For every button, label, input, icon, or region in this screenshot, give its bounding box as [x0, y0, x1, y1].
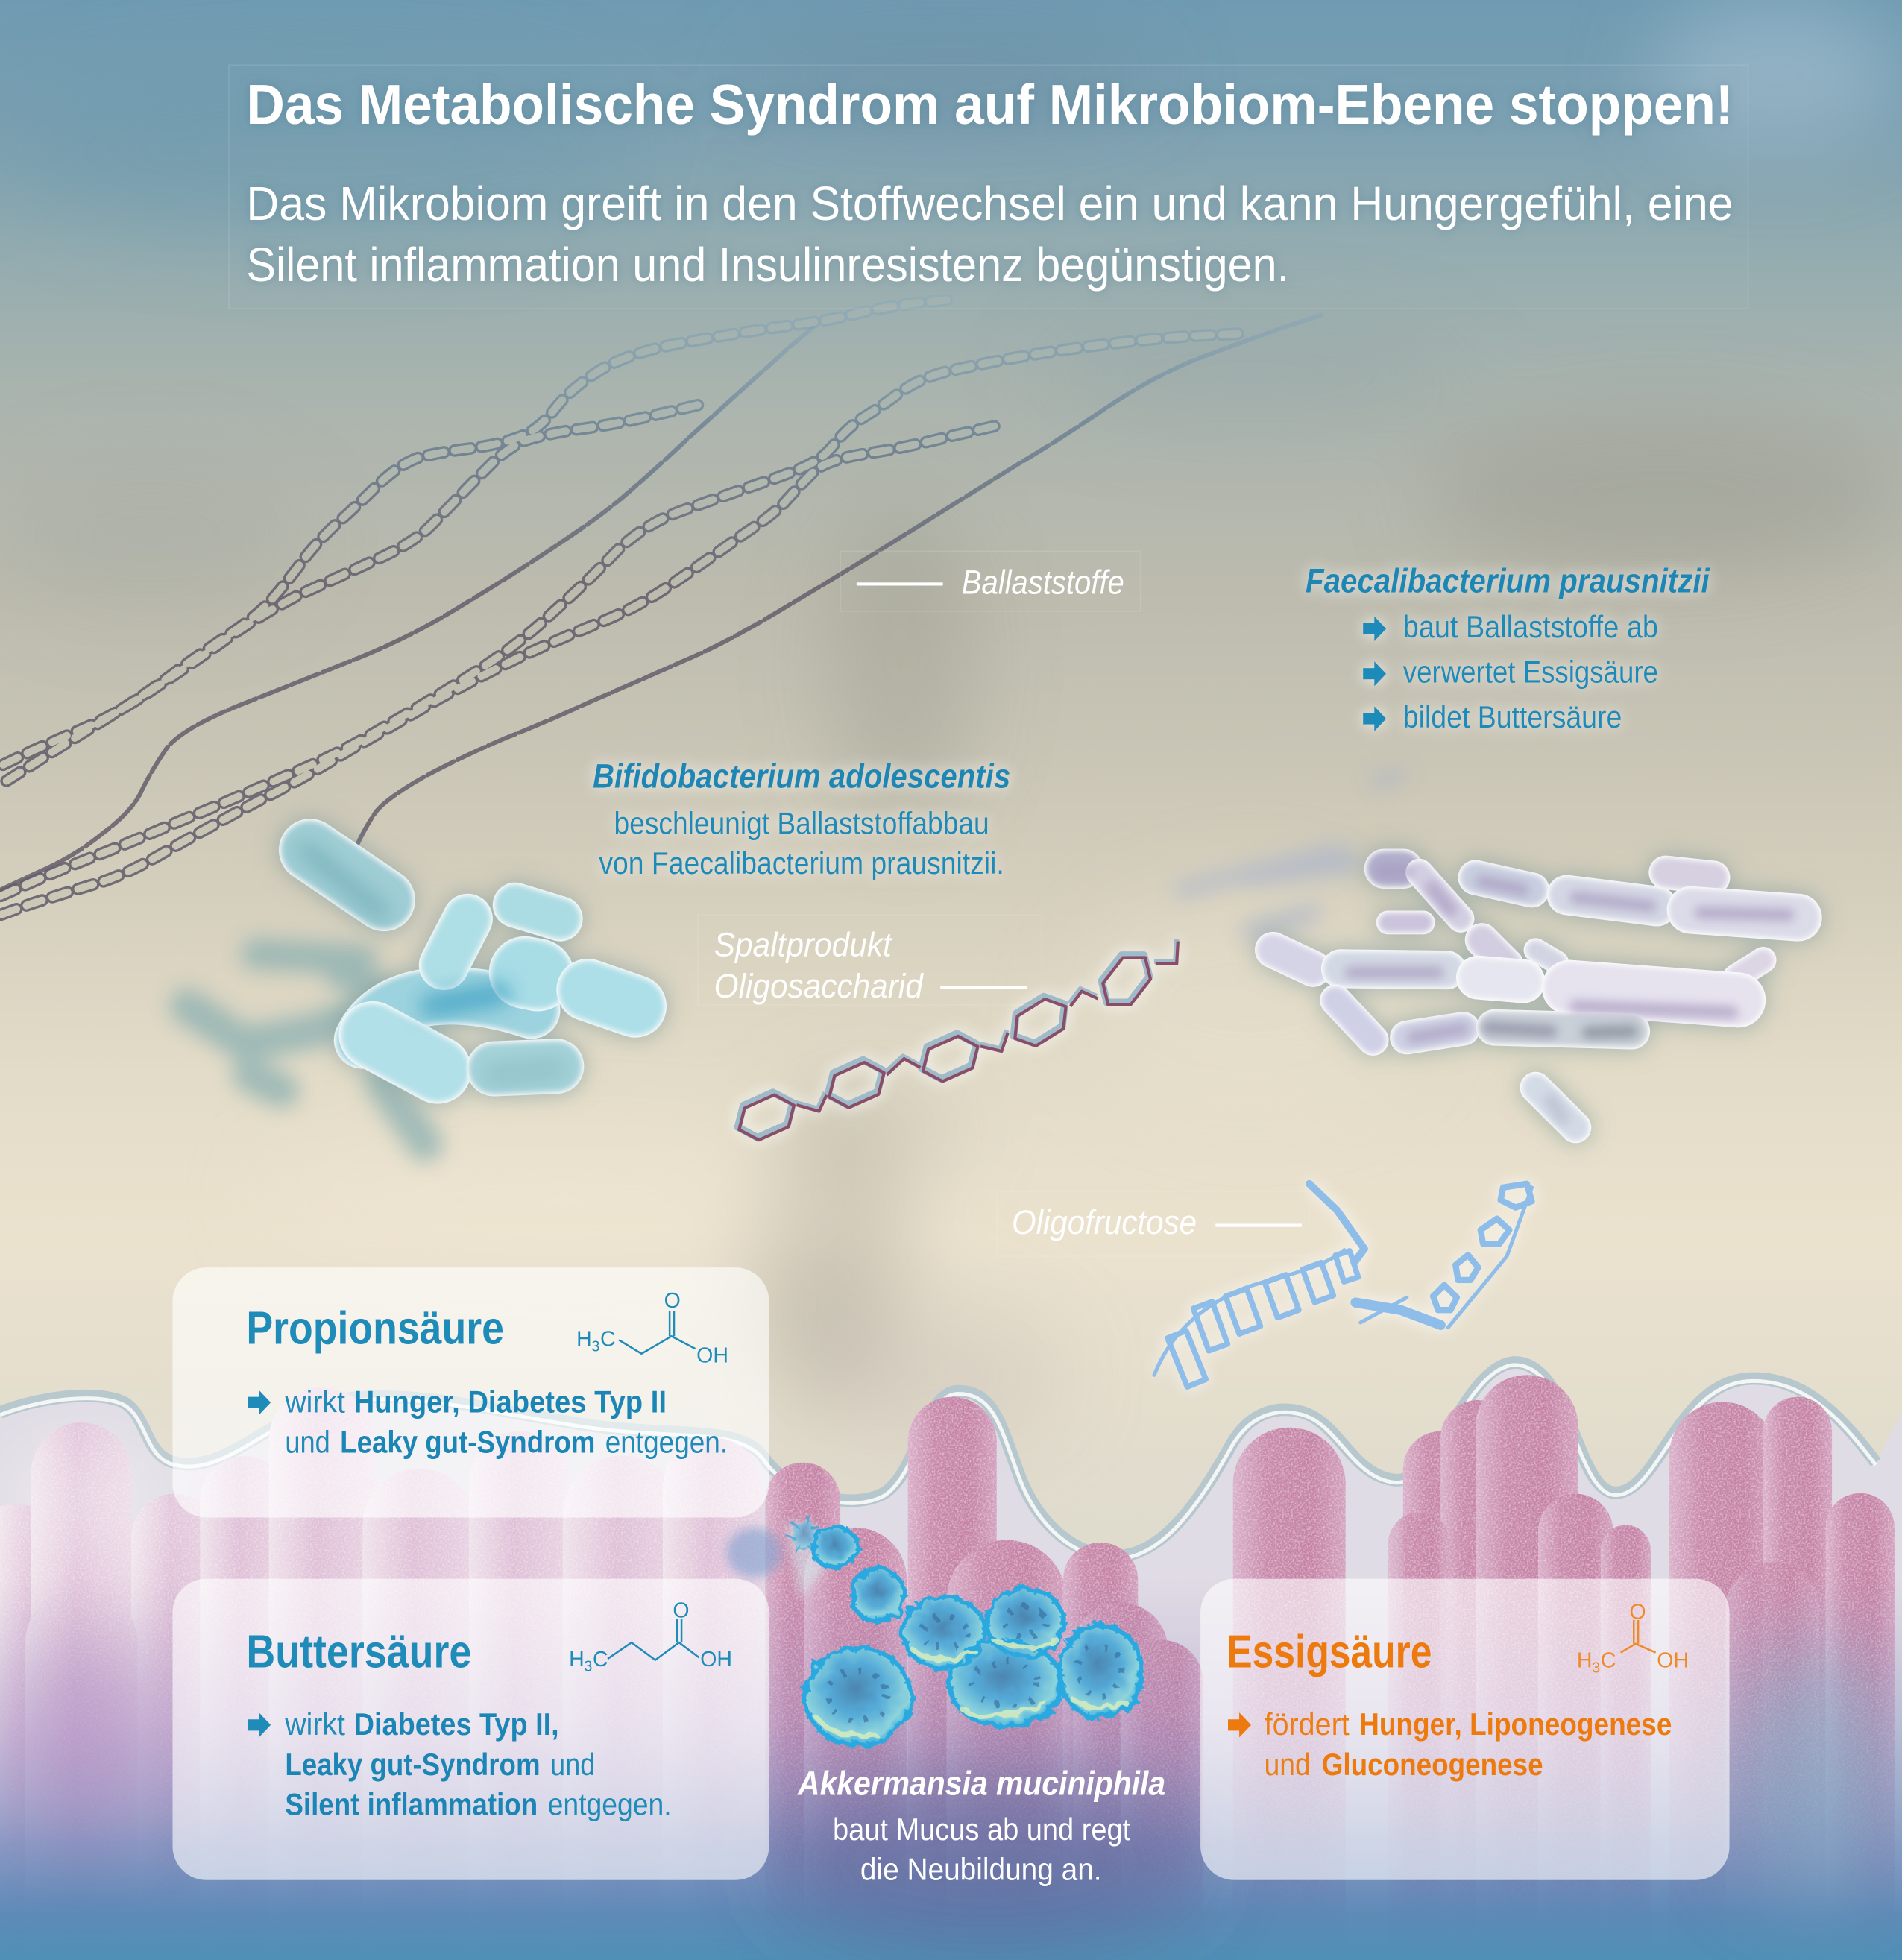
left pale villi [0, 1387, 763, 1960]
panel: Buttersäure [172, 1579, 769, 1880]
formula: propionic acid [576, 1289, 728, 1368]
effect text: und [285, 1424, 330, 1459]
label: Spaltprodukt Oligosaccharid: Spaltprodukt [714, 926, 893, 964]
intro text: Silent inflammation und Insulinresistenz begünstigen. [246, 238, 1289, 292]
text block: Faecalibacterium prausnitzii [1306, 562, 1710, 734]
formula: propionic acid: H [576, 1328, 592, 1352]
label: Spaltprodukt Oligosaccharid: Oligosaccharid [714, 967, 924, 1005]
effect text: Leaky gut-Syndrom [340, 1424, 595, 1459]
formula: butyric acid: 3 [584, 1659, 592, 1675]
panel: Propionsäure [172, 1267, 769, 1517]
text block: Faecalibacterium prausnitzii: Faecalibacterium prausnitzii [1306, 562, 1710, 600]
text block: Bifidobacterium adolescentis: beschleunigt Ballaststoffabbau [614, 805, 989, 840]
text block: Faecalibacterium prausnitzii: verwertet Essigsäure [1403, 654, 1658, 689]
label: Oligofructose: Oligofructose [1012, 1203, 1197, 1241]
label: Ballaststoffe [840, 551, 1141, 611]
effect text: Silent inflammation [285, 1787, 538, 1822]
text block: Bifidobacterium adolescentis: Bifidobacterium adolescentis [593, 757, 1010, 795]
text block: Akkermansia muciniphila [797, 1765, 1165, 1887]
formula: propionic acid: 3 [591, 1338, 599, 1355]
intro text: Das Mikrobiom greift in den Stoffwechsel ein und kann Hungergefühl, eine [246, 177, 1733, 230]
formula: butyric acid: H [569, 1648, 585, 1671]
effect text: Hunger, Diabetes Typ II [354, 1384, 667, 1419]
arrow [1228, 1712, 1251, 1738]
text block: Akkermansia muciniphila: die Neubildung an. [860, 1852, 1102, 1887]
heading: Propionsäure [246, 1302, 504, 1354]
fog over villi [0, 1437, 1902, 1960]
oligofructose molecule [1154, 1184, 1532, 1387]
oligosaccharide molecule [731, 939, 1178, 1146]
effect text: wirkt [284, 1384, 345, 1419]
effect text [1265, 1707, 1672, 1782]
intro text [246, 177, 1733, 292]
effect text: entgegen. [548, 1787, 672, 1822]
right strong villi [765, 1375, 1895, 1960]
effect text [284, 1707, 672, 1822]
formula: propionic acid: O [664, 1289, 681, 1313]
effect text: Hunger, Liponeogenese [1359, 1707, 1672, 1742]
heading: Buttersäure [246, 1627, 471, 1678]
formula: acetic acid: H [1577, 1649, 1593, 1673]
text block: Bifidobacterium adolescentis [593, 757, 1010, 880]
formula: acetic acid: OH [1657, 1649, 1689, 1673]
effect text [284, 1384, 728, 1459]
heading: Essigsäure [1226, 1627, 1432, 1678]
effect text: entgegen. [605, 1424, 728, 1459]
formula: acetic acid [1577, 1600, 1689, 1676]
formula: butyric acid [569, 1599, 732, 1675]
formula: propionic acid: C [600, 1328, 616, 1352]
text block: Akkermansia muciniphila: Akkermansia muciniphila [797, 1765, 1165, 1803]
intestinal villi [0, 1363, 1902, 1960]
effect text: Diabetes Typ II, [354, 1707, 559, 1742]
text block: Akkermansia muciniphila: baut Mucus ab und regt [833, 1812, 1130, 1847]
formula: acetic acid: O [1629, 1600, 1646, 1624]
arrow [248, 1390, 271, 1415]
text block: Bifidobacterium adolescentis: von Faecalibacterium prausnitzii. [599, 845, 1004, 880]
title: Das Metabolische Syndrom auf Mikrobiom-Ebene stoppen! [246, 73, 1733, 136]
effect text: Gluconeogenese [1322, 1747, 1543, 1782]
label: Spaltprodukt Oligosaccharid [698, 915, 1042, 1005]
bacteria: Bifidobacterium adolescentis [188, 850, 635, 1144]
effect text: und [550, 1747, 595, 1782]
text block: Faecalibacterium prausnitzii: bildet Buttersäure [1403, 699, 1622, 734]
fibre chains: Ballaststoffe [0, 300, 1322, 915]
arrow [248, 1712, 271, 1738]
effect text: wirkt [284, 1707, 345, 1742]
formula: butyric acid: OH [700, 1648, 732, 1671]
formula: acetic acid: 3 [1592, 1660, 1600, 1676]
bacteria: Faecalibacterium prausnitzii [1182, 775, 1798, 1127]
bacteria: Akkermansia muciniphila [726, 1519, 1141, 1745]
formula: propionic acid: OH [696, 1344, 728, 1368]
label: Ballaststoffe: Ballaststoffe [962, 563, 1124, 601]
header frame [229, 65, 1748, 309]
label: Oligofructose [997, 1191, 1309, 1256]
formula: butyric acid: O [673, 1599, 690, 1623]
effect text: und [1265, 1747, 1311, 1782]
effect text: fördert [1265, 1707, 1350, 1742]
panel: Essigsäure [1200, 1579, 1730, 1880]
formula: butyric acid: C [593, 1648, 608, 1671]
formula: acetic acid: C [1601, 1649, 1616, 1673]
text block: Faecalibacterium prausnitzii: baut Ballaststoffe ab [1403, 609, 1658, 644]
effect text: Leaky gut-Syndrom [285, 1747, 541, 1782]
